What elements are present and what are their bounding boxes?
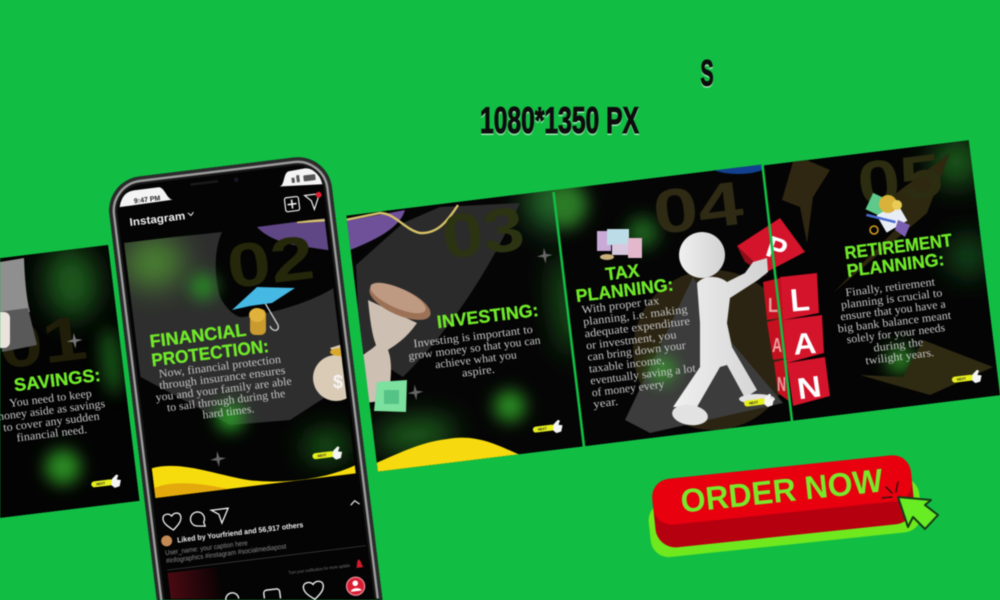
body text [837,278,952,365]
heading: letter S: S [700,54,714,95]
divider lines [554,165,792,447]
body text: twilight years. [865,347,935,367]
block N: N [795,370,824,406]
panel: 02 financial protection [124,218,356,499]
title: INVESTING: [436,300,540,332]
body text: You need to keep [9,388,93,410]
app header: Instagram [129,210,186,229]
phone bezel [107,155,381,600]
number 02: 02 [223,223,318,302]
status bar [118,166,322,209]
panel: 04 tax planning [554,164,792,447]
heading: letter S: S [700,52,714,94]
status bar: 9:47 PM [134,195,161,205]
block A: A [792,327,818,362]
icon: green cash cube [374,380,407,412]
body text: big bank balance meant [837,310,953,335]
lightning bolts [782,153,993,395]
heading: dimensions: 1080*1350 PX [480,102,639,142]
grey cone [625,277,783,433]
illustration: PLAN blocks [780,273,830,406]
block L: L [788,281,811,319]
sparkle [209,450,227,468]
illustration: white 3D figure [671,232,775,427]
phone mockup [108,156,384,600]
next button: NEXT [957,376,967,382]
heading: dimensions: 1080*1350 PX [480,100,639,141]
title: FINANCIAL [149,320,247,351]
click marks [882,482,898,498]
body text [152,353,295,427]
body text: to sail through during the [166,388,286,414]
icon: money bag: $ [333,372,343,392]
green glows [121,216,350,481]
heading: dimensions [480,100,639,142]
grey backdrop [120,232,352,425]
notification note: Turn your notification for more update [288,563,351,575]
label: ORDER NOW [679,461,885,520]
next button on panel 04 [743,393,775,410]
icon: sleeve and cuff [0,258,37,352]
icon: reels [263,589,281,600]
purple hat [340,210,405,250]
caption: #infographics #instagram #socialmediapost [166,543,287,565]
glow on body [648,356,676,384]
illustration: PLAN ghost column [763,278,790,402]
yellow wave [376,436,519,472]
bottom nav [225,576,366,600]
body text: ensure that you have a [840,299,946,323]
icon: search [225,592,239,600]
yellow wave [152,443,356,499]
next button [951,369,982,386]
body text [581,292,700,411]
sparkle [67,333,82,348]
body text: planning, i.e. making [582,304,688,328]
panel: 04 tax planning: PLANNING: [575,274,674,306]
sparkles [537,248,552,264]
next button [90,474,122,491]
icon: retirement savings [866,193,910,237]
body text: With proper tax [581,295,660,317]
icon: heart [303,581,325,600]
title: RETIREMENT [843,230,953,263]
body text: during the [873,337,924,355]
body text [408,326,541,379]
body text: through insurance ensures [159,365,287,392]
icon: hourglass [362,282,432,404]
icon: profile [346,576,366,596]
panel: 02 financial protection: PROTECTION: [150,336,270,370]
illustration: PLAN ghost column: L [768,295,778,317]
grey diagonal shape [340,194,528,412]
icon: comment [190,511,205,528]
panel: 05 retirement planning: PLANNING: [846,249,945,281]
next button on panel 04: NEXT [749,400,759,406]
body text: you and your family are able [155,376,292,404]
body text: hard times. [202,403,255,422]
illustration: block P [737,218,805,276]
icon: collapse chevron [350,500,360,505]
next button: NEXT [317,453,328,458]
body text: planning is crucial to [840,287,943,312]
body text: achieve what you [435,349,518,371]
illustration: PLAN ghost column: A [772,335,782,357]
panel: 01 savings [0,242,140,528]
illustration: PLAN ghost column: N [777,374,786,396]
carousel strip [0,113,1000,540]
next button: NEXT [96,481,106,486]
title: TAX [604,260,640,284]
body text: to cover any sudden [3,411,101,434]
icon: heart [162,513,182,531]
post actions [162,507,230,531]
lime base [647,476,923,559]
body text: year. [593,396,619,411]
title: SAVINGS: [13,365,102,395]
phone body [105,153,382,600]
body text: aspire. [461,364,496,380]
brown backdrop [633,270,793,430]
gold ribbon [340,205,458,233]
blue shape [714,164,762,175]
likes row: Liked by Yourfriend and 56,917 others [177,520,304,545]
number 03: 03 [438,194,528,273]
preview thumbnail [168,567,221,600]
body text: can bring down your [587,340,687,364]
gold ribbon [297,219,345,222]
body text: solely for your needs [846,322,946,346]
icon: share [211,508,230,524]
next button [312,446,343,462]
icon: umbrella with coins [232,287,295,335]
body text: eventually saving a lot [590,363,697,388]
icon: add post [284,196,300,212]
body text: Finally, retirement [845,276,936,299]
body text: grow money so that you can [408,335,542,363]
order now button [644,453,938,559]
body text: adequate expenditure [584,316,691,340]
panel: 03 investing [346,190,584,472]
number 04: 04 [649,169,748,248]
app header [129,191,323,232]
icon: cursor [898,497,938,529]
number 05: 05 [854,141,946,220]
body text: Investing is important to [413,324,534,350]
next button: NEXT [538,426,548,432]
icon: direct message [304,191,323,210]
body text [0,390,106,442]
illustration: block P: P [762,230,791,268]
icon: tax papers [597,229,642,260]
next button [532,419,563,436]
caption: User_name: your caption here [165,540,248,557]
body text: or investment, you [585,329,677,352]
panel: 05 retirement planning [763,140,1000,422]
button side [650,454,916,549]
body text: Now, financial protection [158,354,282,381]
heading: letter S [700,52,714,95]
body text: financial need. [16,424,88,444]
body text: of money every [591,379,665,399]
purple hat [256,218,329,251]
body text: taxable income, [588,354,665,376]
button top [650,454,914,526]
